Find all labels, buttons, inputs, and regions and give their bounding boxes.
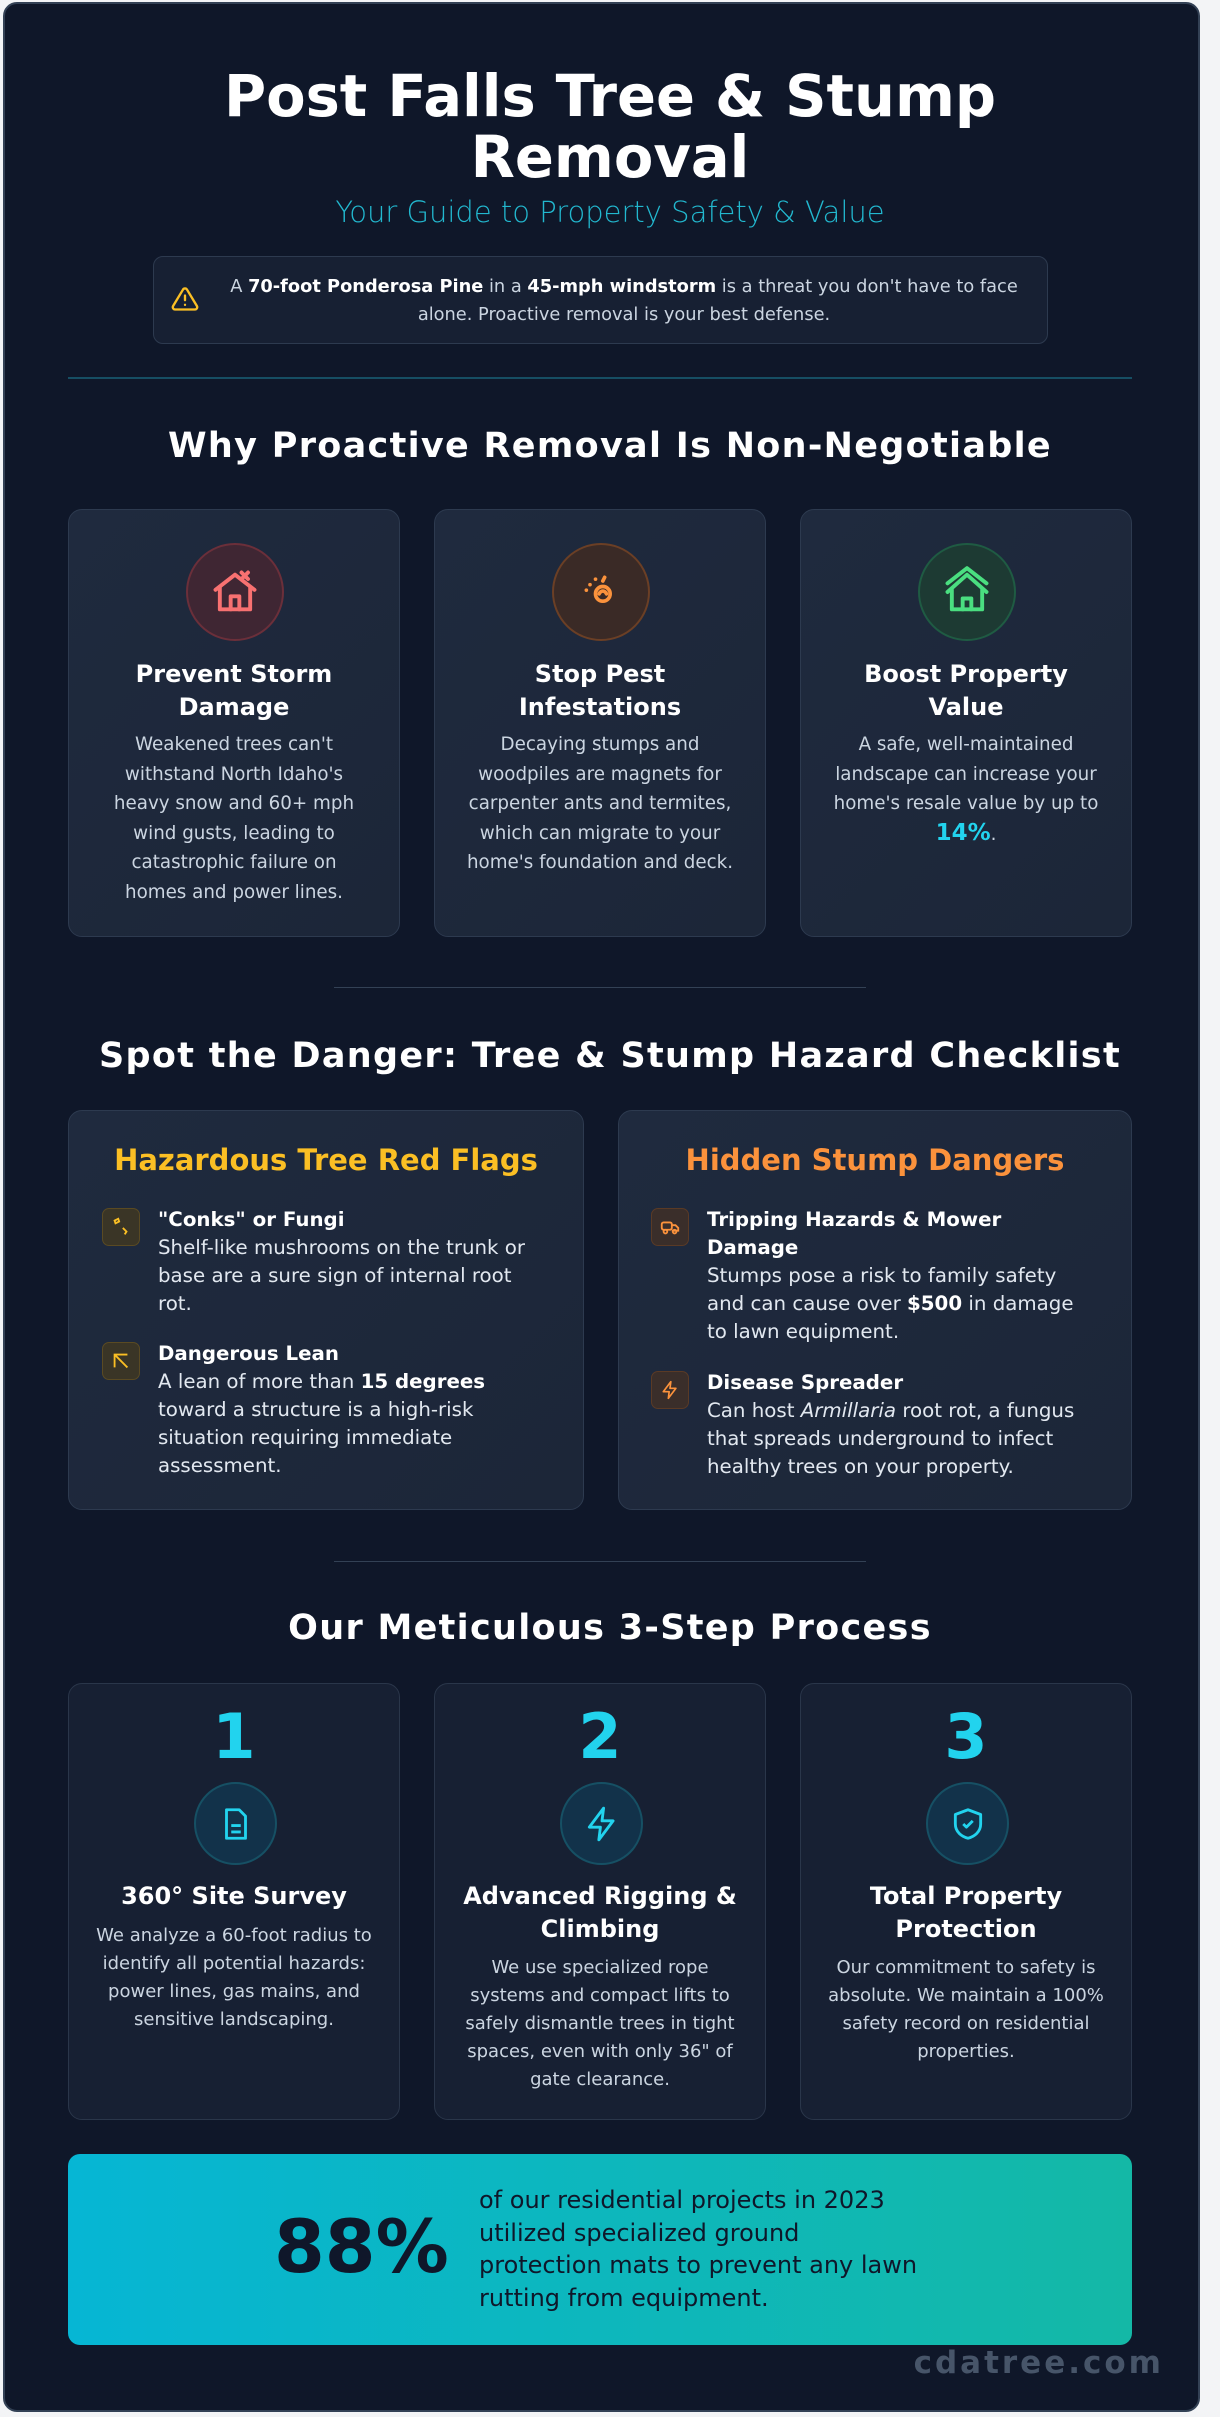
item: disease xyxy=(651,1371,1074,1478)
step 2: 2 xyxy=(578,1700,622,1773)
icon: shield xyxy=(926,1782,1009,1865)
panel: value: Boost Property xyxy=(864,660,1068,688)
icon: document xyxy=(194,1782,277,1865)
item: tripping xyxy=(651,1208,1074,1343)
panel: pests: Infestations xyxy=(519,693,681,721)
step 2 xyxy=(434,1683,766,2120)
panel: storm damage: Weakened trees can't withstand North Idaho's heavy snow and 60+ mph wind gusts, leading to catastrophic failure on homes and power lines. xyxy=(114,734,354,902)
panel: storm damage xyxy=(68,509,400,937)
step 1: 1 xyxy=(212,1700,256,1773)
step 3 xyxy=(800,1683,1132,2120)
panel: value xyxy=(800,509,1132,937)
icon: warning xyxy=(172,287,198,311)
alert text: A 70-foot Ponderosa Pine in a 45-mph windstorm is a threat you don't have to face alone. Proactive removal is your best defense. xyxy=(230,276,1018,325)
item: lean: A lean of more than 15 degrees toward a structure is a high-risk situation requiring immediate assessment. xyxy=(158,1370,485,1477)
panel: pests xyxy=(434,509,766,937)
item: tripping: Tripping Hazards & Mower Damage xyxy=(707,1208,1001,1259)
panel: storm damage: Prevent Storm xyxy=(136,660,332,688)
title xyxy=(224,63,996,191)
item: lean: Dangerous Lean xyxy=(158,1342,339,1365)
panel: pests: Decaying stumps and woodpiles are magnets for carpenter ants and termites, which can migrate to your home's foundation and deck. xyxy=(467,734,733,873)
alert box xyxy=(153,256,1048,344)
heading: process: Our Meticulous 3-Step Process xyxy=(288,1608,932,1648)
title: Removal xyxy=(471,124,749,191)
panel: value: A safe, well-maintained landscape can increase your home's resale value by up to 14%. xyxy=(834,734,1098,846)
step 1: We analyze a 60-foot radius to identify all potential hazards: power lines, gas mains, and sensitive landscaping. xyxy=(96,1925,372,2030)
heading: checklist: Spot the Danger: Tree & Stump Hazard Checklist xyxy=(99,1036,1121,1076)
step 2: Climbing xyxy=(541,1915,659,1943)
panel: stump dangers xyxy=(618,1110,1132,1510)
step 2: We use specialized rope systems and compact lifts to safely dismantle trees in tight spaces, even with only 36" of gate clearance. xyxy=(465,1957,735,2090)
item: conks: "Conks" or Fungi xyxy=(158,1208,344,1231)
step 3: Protection xyxy=(895,1915,1037,1943)
panel: storm damage: Damage xyxy=(179,693,289,721)
heading: why: Why Proactive Removal Is Non-Negotiable xyxy=(168,426,1052,466)
panel heading: Hazardous Tree Red Flags xyxy=(114,1143,538,1177)
item: lean xyxy=(102,1342,485,1477)
panel: tree red flags xyxy=(68,1110,584,1510)
footer brand: cdatree.com xyxy=(914,2345,1164,2381)
stat number: 88% xyxy=(274,2205,449,2290)
step 1: 360° Site Survey xyxy=(121,1882,347,1910)
step 3: Total Property xyxy=(870,1882,1062,1910)
icon: bug xyxy=(552,543,650,641)
item: disease: Disease Spreader xyxy=(707,1371,903,1394)
step 3: 3 xyxy=(944,1700,988,1773)
stat text: of our residential projects in 2023 utilized specialized ground protection mats to prevent any lawn rutting from equipment. xyxy=(479,2186,917,2312)
step 2: Advanced Rigging & xyxy=(463,1882,737,1910)
item: tripping: Stumps pose a risk to family safety and can cause over $500 in damage to lawn equipment. xyxy=(707,1264,1074,1343)
panel: value: Value xyxy=(928,693,1004,721)
panel heading: Hidden Stump Dangers xyxy=(686,1143,1064,1177)
step 3: Our commitment to safety is absolute. We maintain a 100% safety record on residential properties. xyxy=(828,1957,1104,2062)
icon: house xyxy=(186,543,284,641)
icon: home up xyxy=(918,543,1016,641)
subtitle: Your Guide to Property Safety & Value xyxy=(335,195,885,229)
icon: bolt xyxy=(560,1782,643,1865)
item: conks: Shelf-like mushrooms on the trunk or base are a sure sign of internal root rot. xyxy=(158,1236,525,1315)
item: disease: Can host Armillaria root rot, a fungus that spreads underground to infect healthy trees on your property. xyxy=(707,1399,1074,1478)
item: conks xyxy=(102,1208,525,1315)
step 1 xyxy=(68,1683,400,2120)
stat banner xyxy=(68,2154,1132,2345)
title: Post Falls Tree & Stump xyxy=(224,63,996,130)
panel: pests: Stop Pest xyxy=(535,660,665,688)
